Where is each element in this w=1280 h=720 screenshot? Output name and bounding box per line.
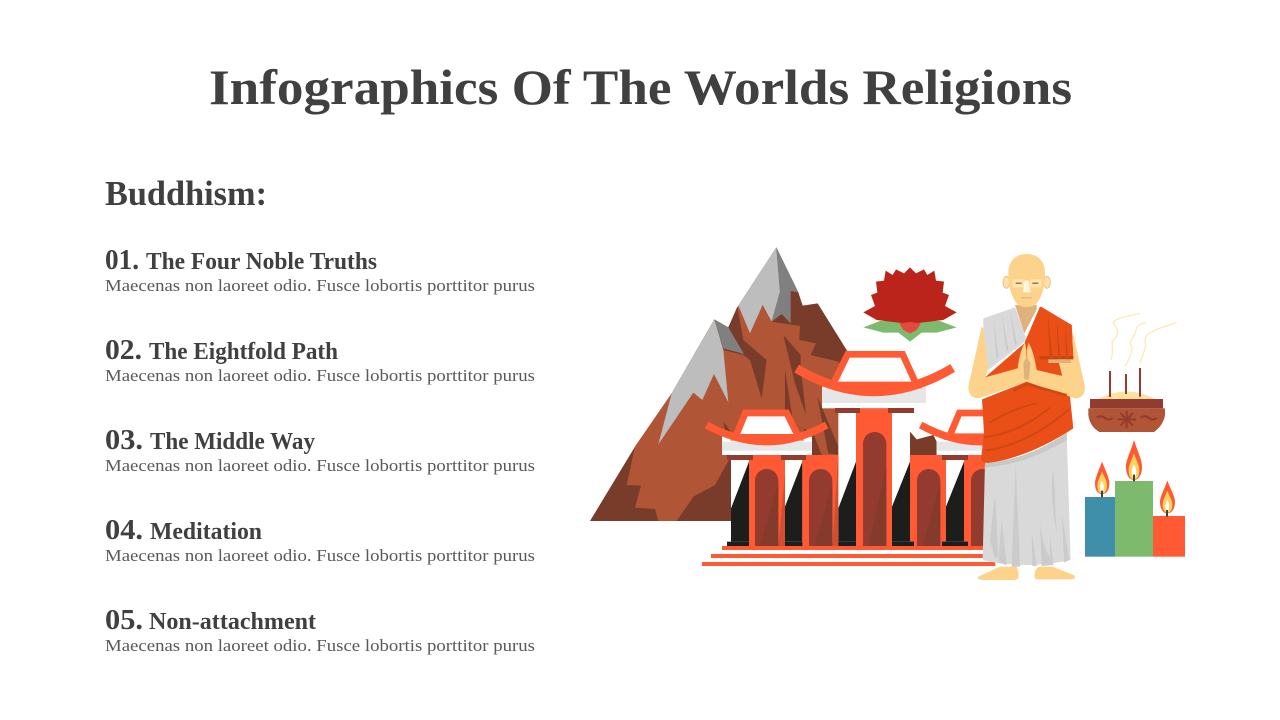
left small temple roof	[707, 413, 827, 460]
shoulder sash	[1029, 307, 1073, 358]
illustration: temple	[702, 354, 1041, 566]
list item 01: Maecenas non laoreet odio. Fusce lobortis porttitor purus	[105, 276, 535, 295]
list item 03: Maecenas non laoreet odio. Fusce lobortis porttitor purus	[105, 456, 535, 475]
list item 03: 03.	[105, 424, 143, 456]
title: Infographics Of The Worlds Religions	[209, 59, 1072, 115]
white columns with black shadows	[727, 403, 926, 546]
list item 01	[105, 244, 535, 295]
flame middle	[1126, 440, 1142, 481]
chest robe	[985, 307, 1073, 377]
list item 04: 04.	[105, 514, 143, 546]
flame left	[1095, 462, 1109, 497]
illustration: monk	[968, 254, 1085, 580]
list item 05	[105, 604, 535, 655]
list item 02: 02.	[105, 334, 142, 366]
illustration: mountains	[590, 247, 937, 521]
hand shading	[1023, 357, 1030, 379]
illustration: incense bowl	[1088, 313, 1177, 432]
list item 03	[105, 424, 535, 475]
list item 05: Maecenas non laoreet odio. Fusce lobortis porttitor purus	[105, 636, 535, 655]
list item 05: Non-attachment	[149, 609, 316, 635]
upper grey robe	[968, 305, 1085, 398]
illustration: lotus flower	[863, 267, 957, 342]
list item 01: The Four Noble Truths	[146, 249, 377, 275]
list item 02: Maecenas non laoreet odio. Fusce lobortis porttitor purus	[105, 366, 535, 385]
arms and praying hands	[968, 327, 1027, 398]
body robe	[981, 382, 1073, 463]
feet	[978, 567, 1075, 580]
illustration: candles	[1085, 440, 1185, 557]
list item 01: 01.	[105, 244, 139, 276]
lower robe	[983, 433, 1071, 567]
right small temple	[910, 413, 1041, 546]
list item 04: Meditation	[150, 519, 262, 545]
central temple roof	[797, 354, 953, 413]
neck	[1015, 305, 1037, 333]
bowl ornament	[1097, 411, 1157, 428]
flame right	[1160, 481, 1175, 517]
smoke	[1111, 313, 1177, 367]
list item 02	[105, 334, 535, 385]
list item 04	[105, 514, 535, 565]
head	[1003, 254, 1050, 307]
list item 05: 05.	[105, 604, 143, 636]
list item 03: The Middle Way	[150, 429, 315, 455]
list item 04: Maecenas non laoreet odio. Fusce lobortis porttitor purus	[105, 546, 535, 565]
heading: Buddhism: Buddhism:	[105, 174, 267, 213]
orange columns with arches	[749, 408, 892, 546]
list item 02: The Eightfold Path	[149, 339, 338, 365]
base steps	[702, 546, 995, 566]
